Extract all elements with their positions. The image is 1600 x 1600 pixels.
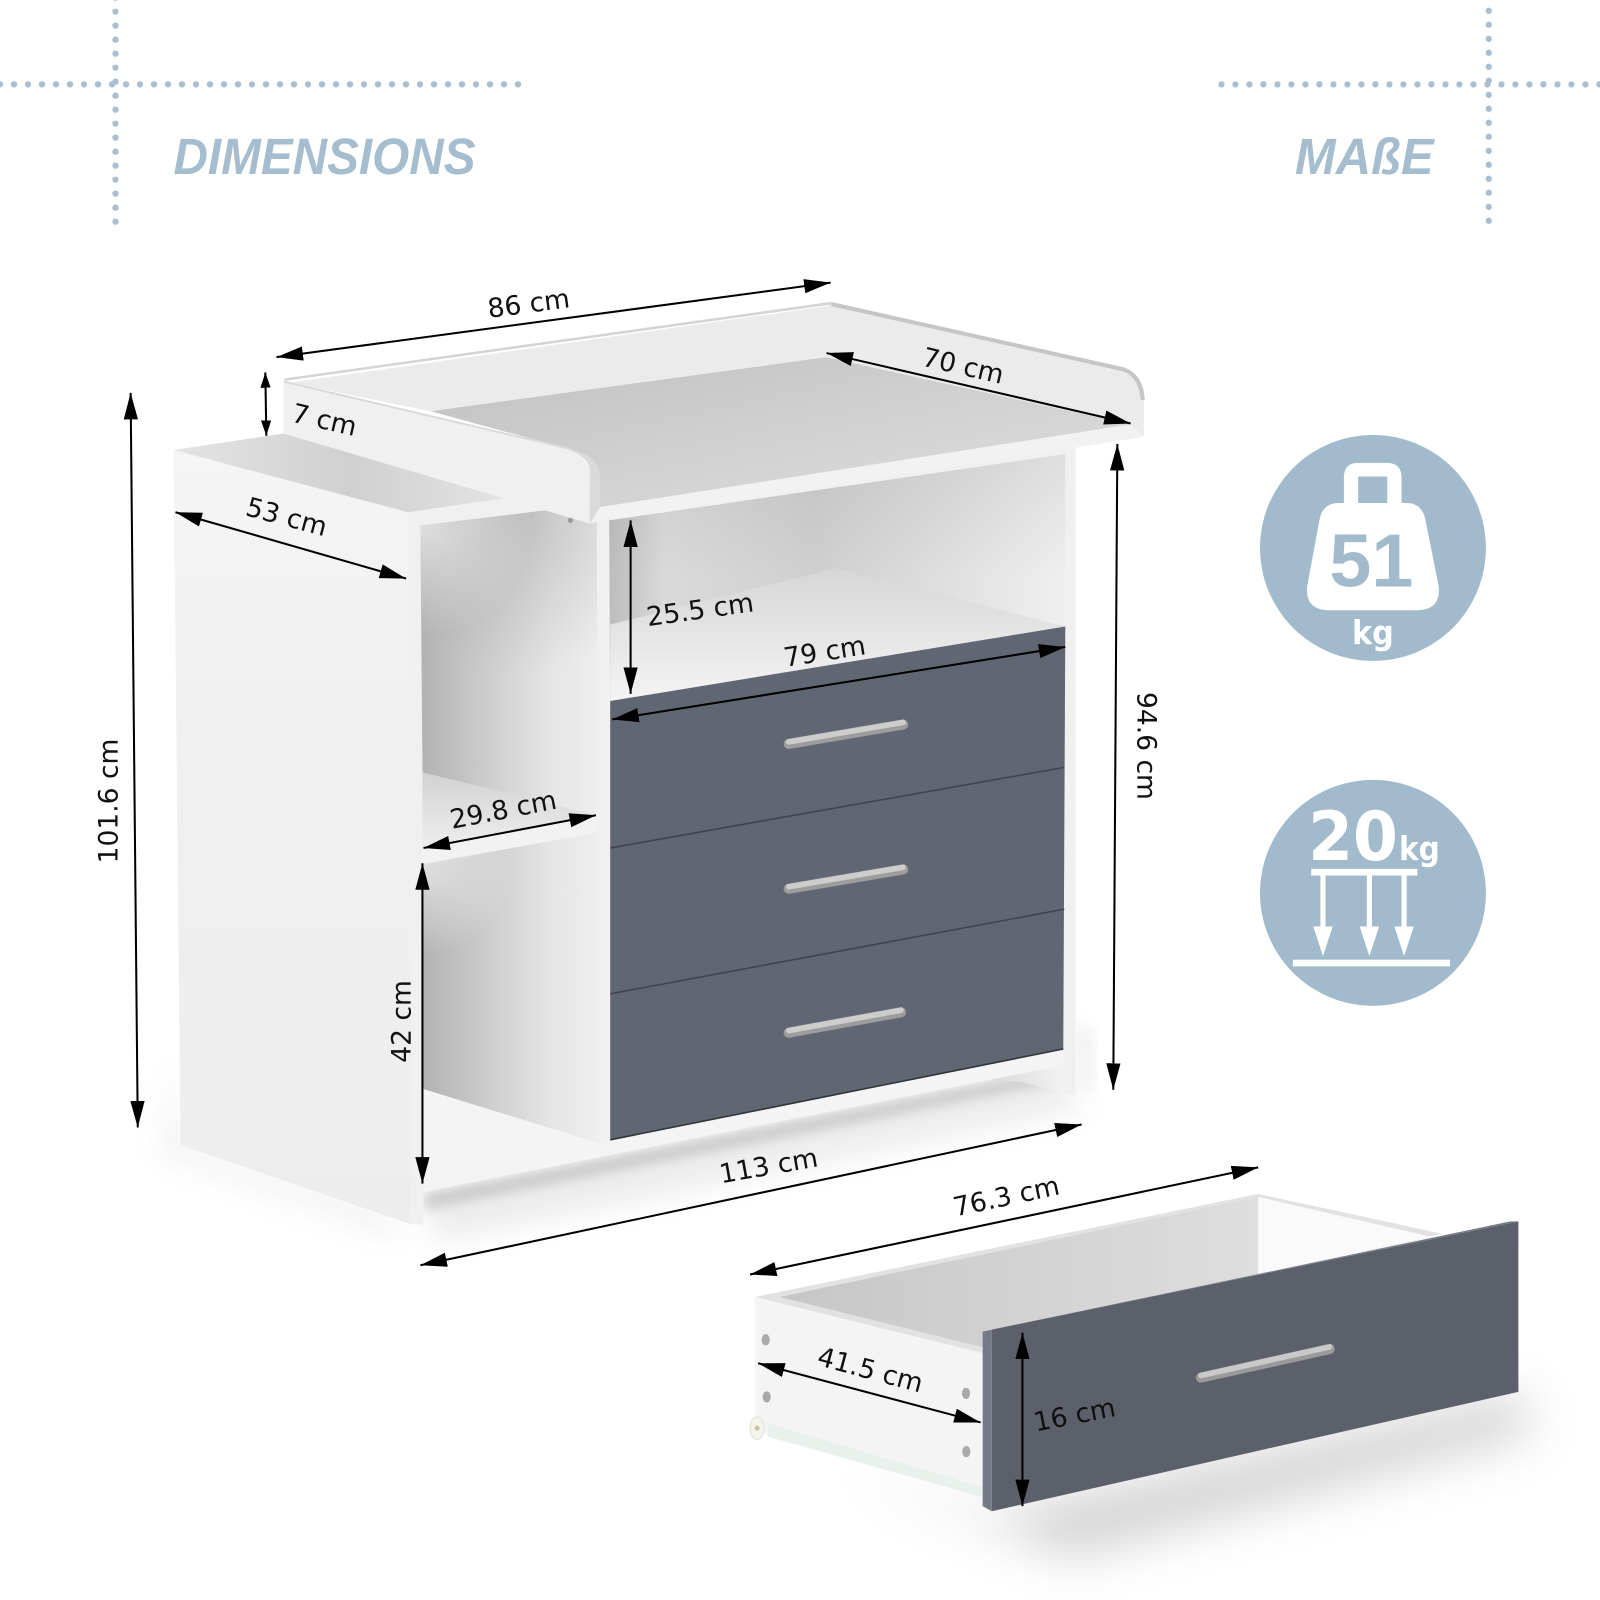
- dimension labels: 53 cm: [243, 492, 330, 543]
- drawer inner back: [780, 1197, 1258, 1347]
- back wall: [290, 306, 827, 411]
- bracket screw: [568, 518, 573, 523]
- screws: [762, 1334, 970, 1457]
- dimension labels: 70 cm: [919, 342, 1007, 391]
- badge: load 20 kg: [1260, 780, 1486, 1006]
- dimension labels: 29.8 cm: [447, 785, 559, 836]
- drawer inner right: [1258, 1197, 1431, 1276]
- dimension labels: 94.6 cm: [1130, 692, 1161, 800]
- back rim: [285, 303, 832, 380]
- lip edge: [284, 381, 600, 523]
- dimension labels: 41.5 cm: [814, 1341, 926, 1399]
- plinth recess: [985, 1065, 1063, 1093]
- drawer rim: [755, 1194, 1442, 1353]
- slide rail: [750, 1417, 982, 1497]
- drawer fronts: [610, 627, 1065, 1140]
- unit: kg: kg: [1352, 614, 1394, 652]
- icon: weight: 51: [1329, 520, 1413, 604]
- dimension labels: 101.6 cm: [94, 739, 125, 863]
- front rail: [590, 424, 1144, 523]
- right rim: [832, 304, 1143, 400]
- middle shelf: [422, 772, 597, 864]
- dimension arrows: [131, 283, 1258, 1506]
- heading: Maße: MAßE: [1295, 128, 1436, 185]
- drawer side: [755, 1297, 983, 1497]
- icon: weight: [1307, 463, 1439, 610]
- drawer handles: [789, 722, 903, 1033]
- dimension labels: 76.3 cm: [950, 1171, 1062, 1223]
- lower left niche: [422, 833, 1063, 1192]
- dimension labels: 79 cm: [781, 630, 868, 674]
- dotted guide lines, left: [0, 0, 518, 222]
- dimension labels: 25.5 cm: [645, 587, 756, 633]
- dimension labels: 113 cm: [717, 1142, 820, 1190]
- left side panel: [173, 434, 528, 1224]
- floor shadows: [163, 1020, 1531, 1556]
- icon: load arrows: [1293, 869, 1450, 966]
- dimension labels: 42 cm: [387, 980, 418, 1063]
- dimension labels: 7 cm: [289, 398, 360, 443]
- changing dresser: [173, 303, 1144, 1224]
- dotted guide lines, right: [1221, 0, 1600, 222]
- cabinet front frame: [408, 439, 1076, 1224]
- drawer handle: [1201, 1347, 1330, 1378]
- heading: Dimensions: DIMENSIONS: [173, 128, 476, 185]
- badge: weight 51 kg: [1260, 435, 1486, 661]
- left lip: [284, 381, 590, 523]
- dimension labels: 16 cm: [1031, 1392, 1118, 1438]
- changing top: [284, 303, 1144, 523]
- right lip: [827, 303, 1144, 437]
- dimension labels: [94, 283, 1161, 1438]
- upper right niche: [609, 454, 1065, 701]
- dimension labels: 86 cm: [486, 283, 572, 325]
- upper left niche: [420, 504, 597, 815]
- drawer front panel: [983, 1221, 1518, 1511]
- load value: 20: [1308, 797, 1398, 876]
- load unit: kg: [1399, 830, 1440, 868]
- removed drawer: [750, 1194, 1518, 1511]
- mat surface: [431, 357, 1131, 507]
